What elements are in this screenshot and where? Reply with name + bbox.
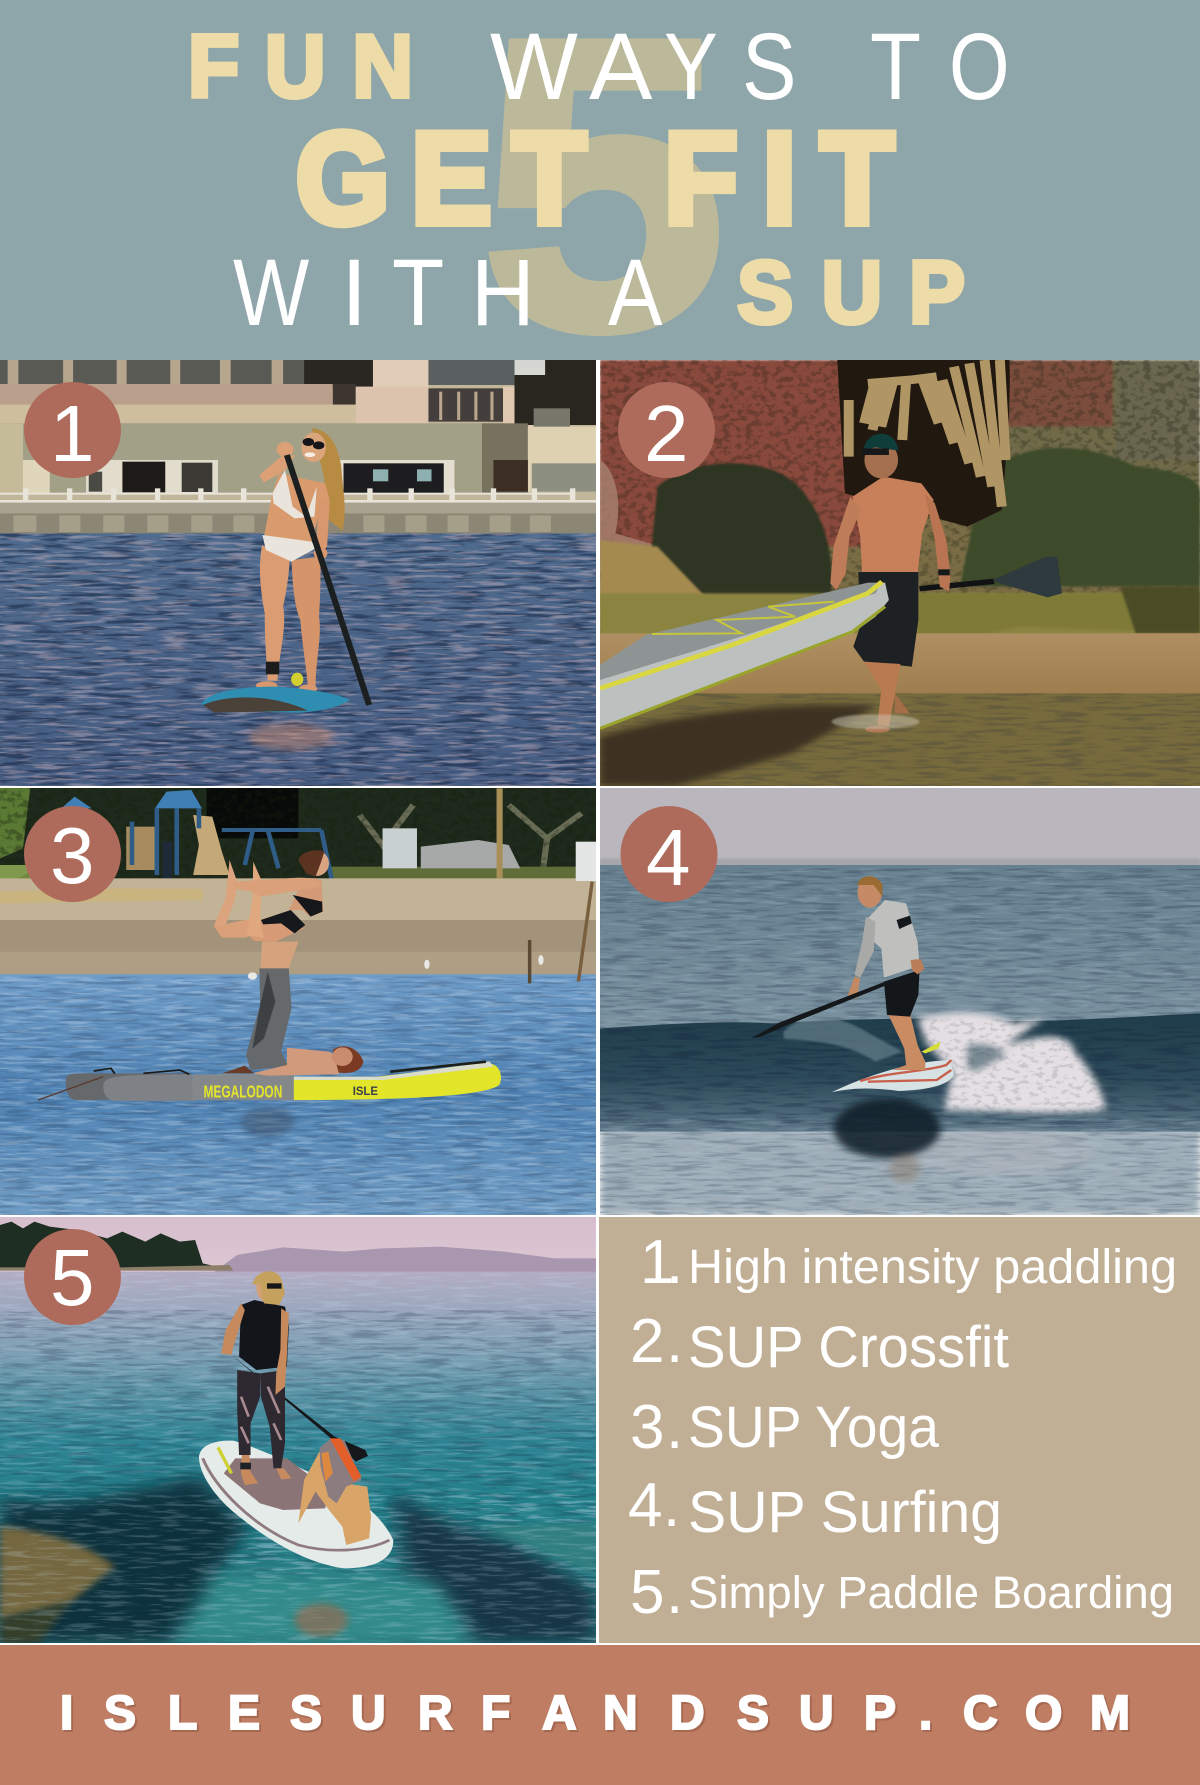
list item 2: SUP Crossfit: [688, 1315, 1009, 1380]
photo 4: SUP surfing: [600, 788, 1200, 1215]
list item 4: 4.: [628, 1471, 680, 1540]
title line: WITH A SUP: SUP: [737, 244, 965, 342]
list item 1: High intensity paddling: [688, 1241, 1177, 1294]
title line: WITH A SUP: W: [233, 239, 309, 345]
board: [600, 582, 889, 728]
photo 3: SUP yoga: [0, 788, 596, 1215]
list item 2: 2.: [630, 1307, 683, 1376]
photo 2: SUP crossfit: [600, 360, 1200, 786]
number badge 1: [24, 382, 121, 478]
title line: FUN WAYS TO: FUN: [188, 18, 413, 116]
number badge 2: [618, 382, 715, 478]
dog in life vest: [298, 1438, 371, 1545]
number badge 2: 2: [644, 389, 688, 478]
title line: GET FIT: GETFIT: [296, 105, 894, 251]
website address: ISLESURFANDSUP.COM: [62, 1689, 1132, 1742]
number badge 1: 1: [50, 389, 94, 478]
number badge 3: 3: [50, 811, 94, 900]
title line: FUN WAYS TO: Y: [664, 13, 718, 119]
title line: WITH A SUP: I: [341, 240, 367, 346]
title line: WITH A SUP: T: [392, 240, 444, 346]
header panel: [0, 0, 1200, 415]
paddle board: MEGALODON: [204, 1082, 282, 1101]
title line: FUN WAYS TO: S: [742, 13, 796, 119]
white water wave: [784, 1013, 1105, 1115]
number badge 4: [620, 806, 718, 902]
number badge 3: [24, 806, 121, 902]
number badge 4: 4: [646, 813, 690, 902]
acro yoga pair: [213, 850, 363, 1076]
surfer on board: [751, 876, 954, 1183]
footer banner: [0, 1645, 1200, 1785]
list item 4: SUP Surfing: [688, 1480, 1002, 1545]
number badge 5: 5: [50, 1233, 94, 1322]
title line: WITH A SUP: A: [608, 239, 662, 345]
woman paddler: [201, 428, 369, 750]
list item 1: 1.: [640, 1228, 683, 1297]
website address: ISLESURFANDSUP.COM: [60, 1687, 1130, 1740]
title line: FUN WAYS TO: A: [589, 14, 653, 120]
title line: FUN WAYS TO: W: [490, 13, 578, 119]
list item 3: 3.: [630, 1393, 683, 1462]
list item 3: SUP Yoga: [688, 1395, 940, 1460]
woman standing with paddle: [221, 1271, 368, 1485]
list item 5: 5.: [630, 1558, 683, 1627]
paddle board: [38, 1062, 501, 1137]
white paddle board: [199, 1441, 393, 1568]
list item 1: [640, 1228, 1177, 1297]
list panel: [599, 1217, 1200, 1643]
man carrying board and paddle: [830, 434, 1062, 733]
title line: WITH A SUP: H: [471, 240, 535, 346]
list item 5: Simply Paddle Boarding: [688, 1567, 1174, 1618]
photo 1: high intensity paddling: [0, 360, 596, 786]
title line: FUN WAYS TO: O: [949, 14, 1010, 120]
paddle board: ISLE: [353, 1084, 378, 1098]
photo 5: simply paddle boarding: [0, 1217, 596, 1643]
title line: FUN WAYS TO: T: [870, 13, 921, 119]
title line: WITH A SUP: [233, 239, 965, 346]
list item 5: [630, 1558, 1174, 1627]
number badge 5: [24, 1229, 121, 1325]
title line: FUN WAYS TO: [188, 13, 1010, 120]
